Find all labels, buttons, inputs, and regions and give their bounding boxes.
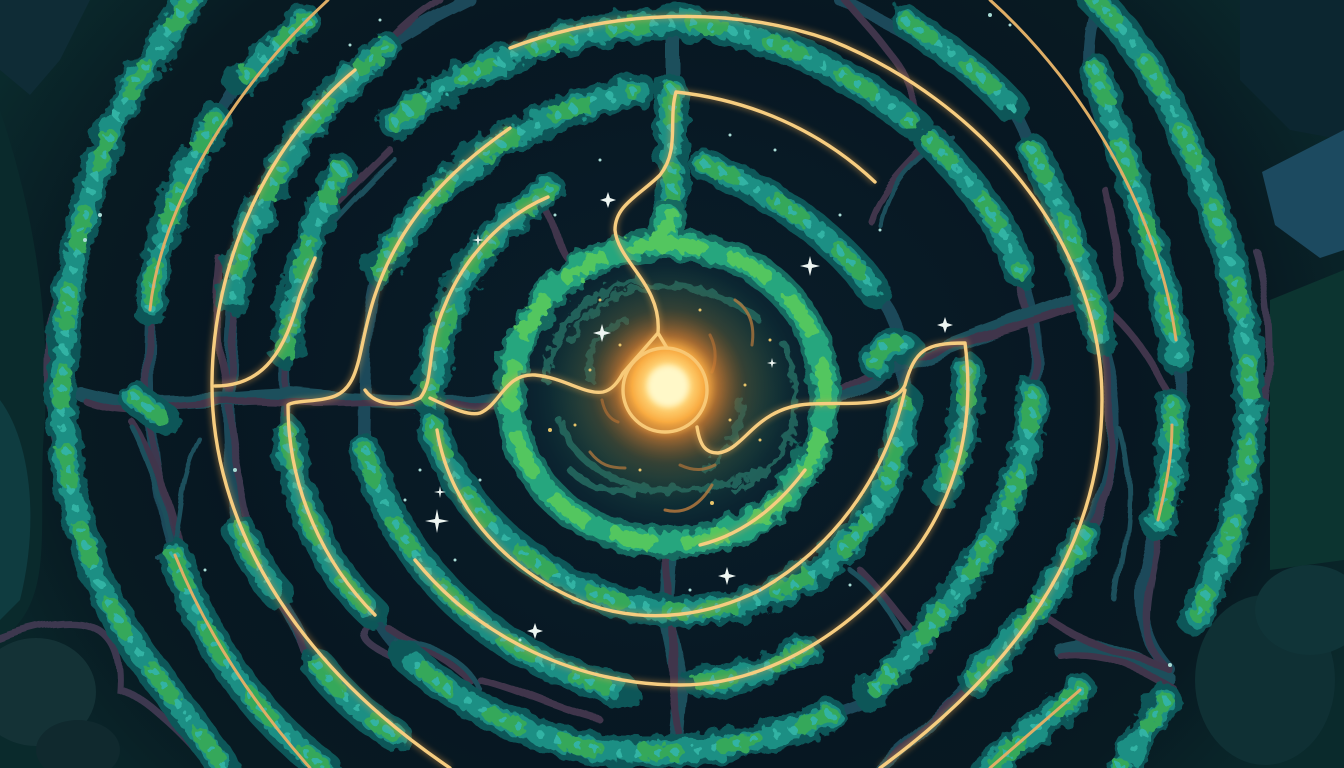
sparkle stars xyxy=(425,192,953,639)
corner foliage: left xyxy=(0,0,120,768)
central glow and swirl xyxy=(512,244,824,544)
gold path: soft glow xyxy=(212,16,1102,768)
scattered speckles xyxy=(83,13,1172,667)
radial vines xyxy=(80,0,1180,745)
inner moss ring xyxy=(511,215,825,543)
gold path: bright line xyxy=(150,0,1176,768)
corner foliage: right xyxy=(1195,0,1344,765)
glowing core xyxy=(626,344,710,428)
golden motes inside ring xyxy=(548,298,772,505)
gold ring around core xyxy=(623,348,707,432)
faint outer gold arcs xyxy=(150,0,1176,768)
